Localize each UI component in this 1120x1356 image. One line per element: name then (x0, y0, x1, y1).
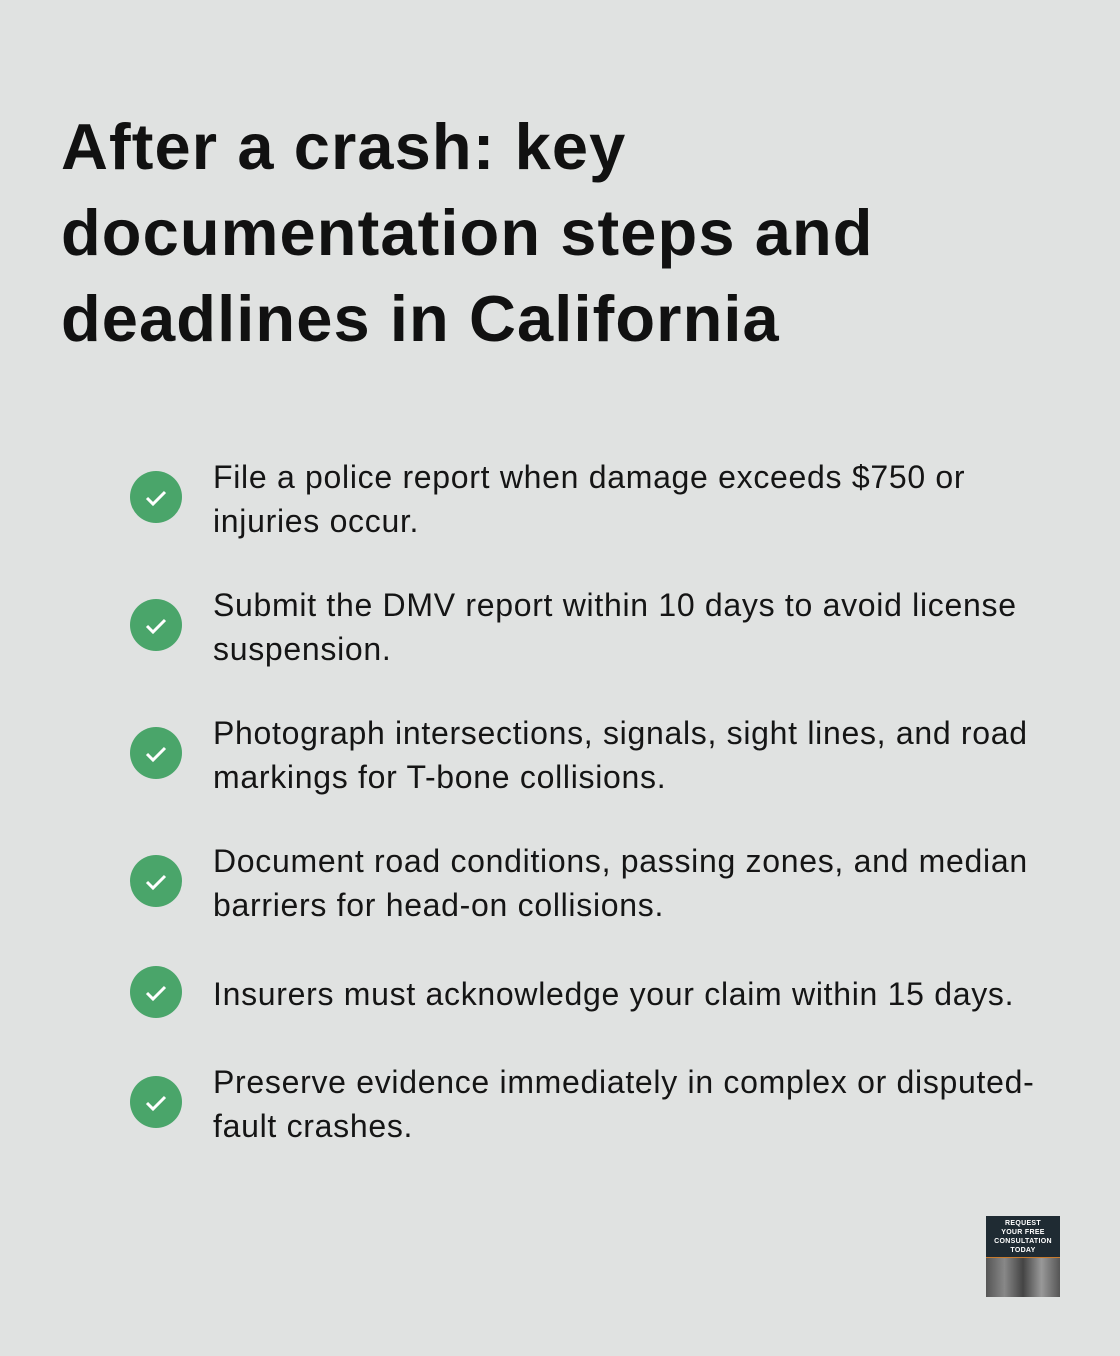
title: deadlines in California (61, 282, 780, 355)
logo: consultation badge: CONSULTATION (994, 1238, 1052, 1245)
item 1: File a police report when damage exceeds $750 or (213, 459, 965, 495)
logo: consultation badge: REQUEST (1005, 1220, 1041, 1227)
item 3: Photograph intersections, signals, sight lines, and road (213, 715, 1028, 751)
logo: consultation badge (986, 1216, 1060, 1296)
logo: consultation badge: TODAY (1010, 1247, 1036, 1254)
item 2 (130, 587, 1017, 667)
item 6: fault crashes. (213, 1108, 413, 1144)
title: After a crash: key (61, 110, 626, 183)
item 4: barriers for head-on collisions. (213, 887, 664, 923)
item 3 (130, 715, 1028, 795)
logo: consultation badge: YOUR FREE (1001, 1229, 1045, 1236)
item 4 (130, 843, 1028, 923)
item 1: injuries occur. (213, 503, 419, 539)
item 6: Preserve evidence immediately in complex or disputed- (213, 1064, 1034, 1100)
item 5: Insurers must acknowledge your claim within 15 days. (213, 976, 1014, 1012)
title: documentation steps and (61, 196, 874, 269)
item 4: Document road conditions, passing zones, and median (213, 843, 1028, 879)
item 3: markings for T-bone collisions. (213, 759, 666, 795)
title (61, 110, 874, 355)
item 1 (130, 459, 965, 539)
item 5 (130, 966, 1014, 1018)
item 2: suspension. (213, 631, 391, 667)
item 6 (130, 1064, 1034, 1144)
item 2: Submit the DMV report within 10 days to avoid license (213, 587, 1017, 623)
